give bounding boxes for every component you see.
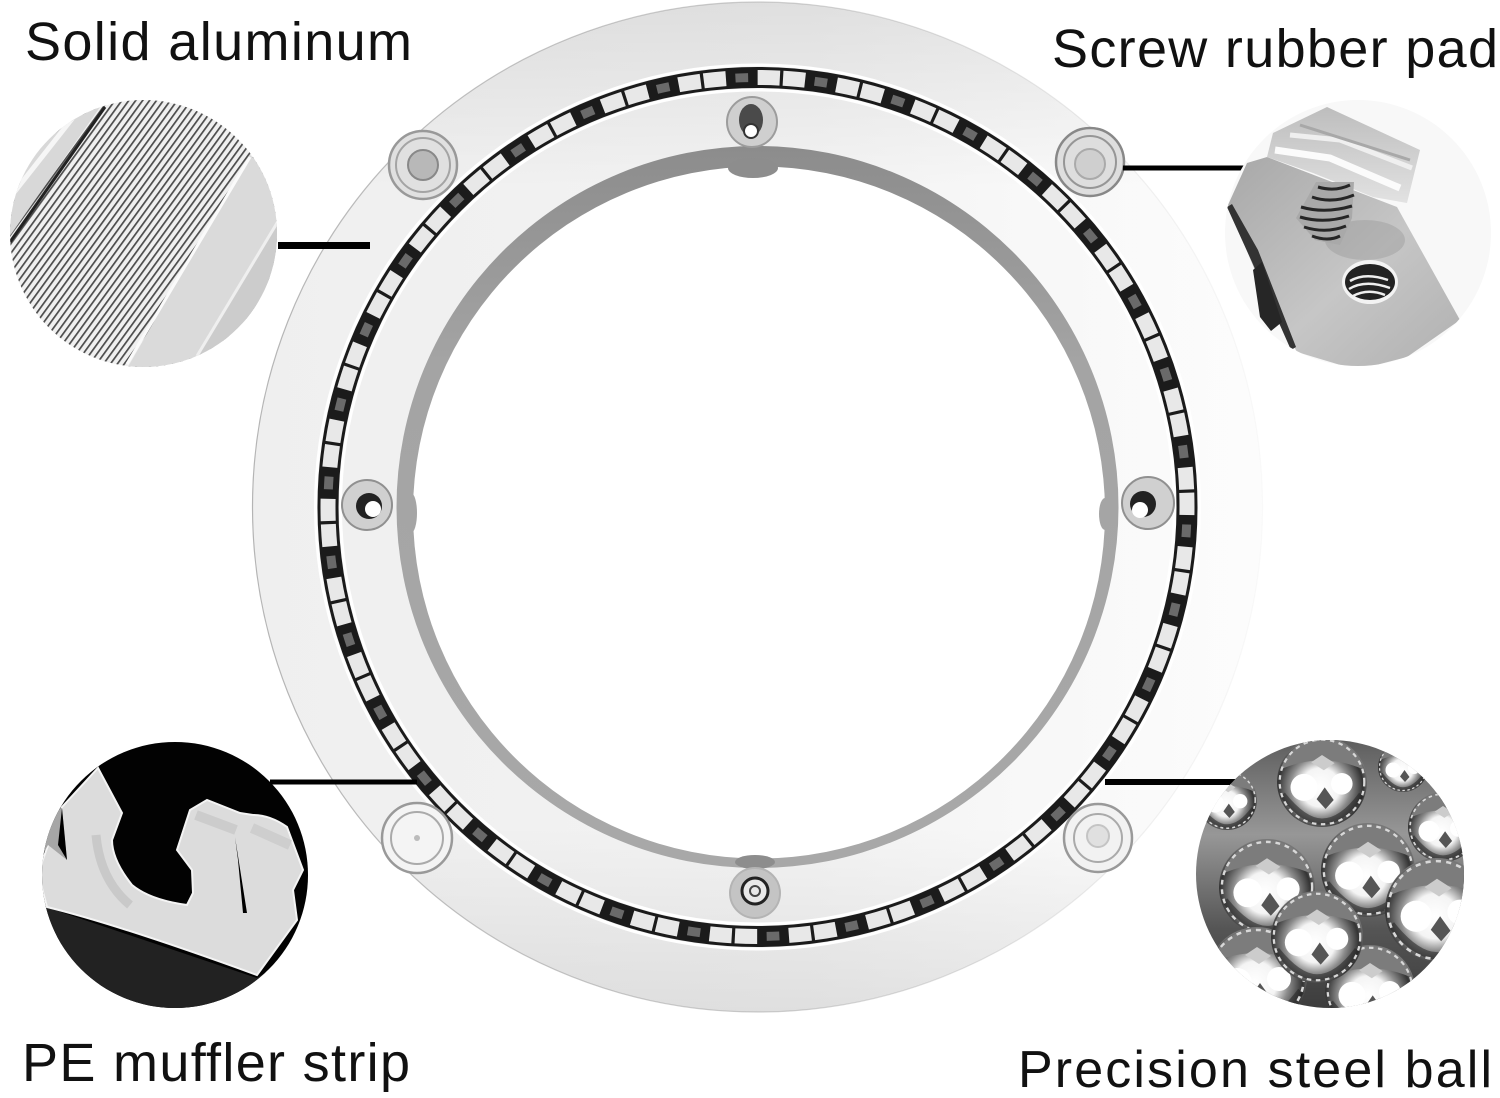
label: Solid aluminum: Solid aluminum [25,12,412,72]
detail circle: PE muffler strip [38,740,310,1010]
metal bracket [1228,157,1460,370]
threaded hole [1342,260,1398,304]
detail circle: screw rubber pad [1227,107,1460,366]
threaded screw [1296,182,1354,245]
screw: right [1122,477,1174,529]
detail circle: precision steel balls [1196,740,1464,1008]
turntable: aluminum bearing [252,2,1262,1012]
screw: left [342,480,392,530]
screw: top [727,97,777,147]
detail circle: solid aluminum surface [10,100,277,367]
clear rubber pad [1267,107,1420,203]
leader line: precision steel ball [1105,779,1235,785]
label: PE muffler strip: PE muffler strip [22,1033,410,1093]
rubber pad: top left [389,131,457,199]
screw: bottom [730,868,780,918]
ball bearing track with cage blocks [290,39,1225,975]
leader line: PE muffler strip [270,780,417,784]
outer aluminum plate [252,2,1262,1012]
label: Screw rubber pad: Screw rubber pad [1052,19,1498,79]
rubber pad: bottom right [1064,804,1132,872]
leader line: solid aluminum [278,242,370,249]
rubber pad: bottom left [382,803,452,873]
label: Precision steel ball: Precision steel ball [1018,1041,1492,1098]
rubber pad: top right [1056,128,1124,196]
bracket dark edge [1227,204,1296,350]
center hole with gray inner lip [396,146,1118,869]
leader line: screw rubber pad [1123,166,1245,170]
